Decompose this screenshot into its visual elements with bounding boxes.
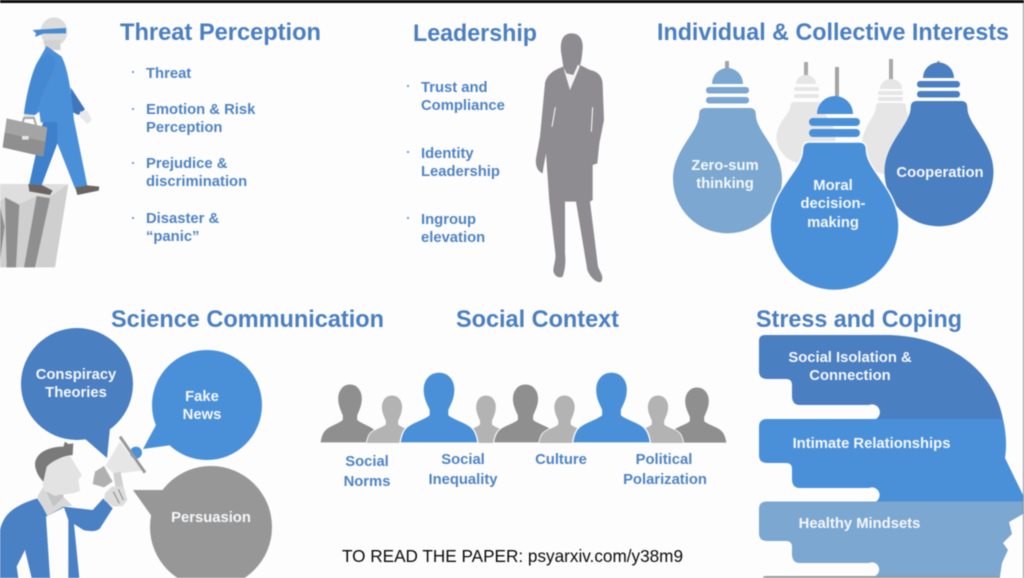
heading: leadership: Leadership bbox=[413, 20, 537, 47]
icon: faded light bulb left bbox=[776, 62, 836, 164]
list: threat topics bbox=[132, 66, 256, 245]
speech bubble: fake news bbox=[143, 350, 262, 460]
panel: threat perception bbox=[0, 17, 321, 267]
list: threat topics: discrimination bbox=[146, 174, 247, 190]
list: leadership topics: Compliance bbox=[421, 98, 505, 114]
panel: leadership bbox=[407, 20, 604, 282]
list: leadership topics: elevation bbox=[421, 230, 485, 246]
label: culture: Culture bbox=[535, 452, 587, 468]
list: threat topics: Prejudice & bbox=[146, 156, 228, 172]
speech bubble: persuasion: Persuasion bbox=[171, 510, 251, 526]
head band: cut-off grey band bbox=[763, 576, 1000, 578]
list: leadership topics bbox=[407, 80, 505, 246]
speech bubble: conspiracy theories: Theories bbox=[45, 385, 107, 401]
head band: social isolation and connection: Social Isolation & bbox=[788, 350, 912, 366]
heading: individual and collective interests: Individual & Collective Interests bbox=[657, 19, 1009, 46]
footer: paper link: TO READ THE PAPER: psyarxiv.com/y38m9 bbox=[342, 546, 683, 566]
icon: light bulb moral decision-making bbox=[770, 67, 899, 290]
head band: intimate relationships: Intimate Relationships bbox=[793, 436, 950, 452]
list: threat topics: Disaster & bbox=[146, 211, 220, 227]
list: leadership topics: Identity bbox=[421, 146, 474, 162]
label: political polarization: Political bbox=[636, 452, 692, 468]
panel: science communication bbox=[0, 306, 384, 578]
list: threat topics: Emotion & Risk bbox=[146, 102, 256, 118]
icon: light bulb zero-sum thinking: Zero-sum bbox=[691, 158, 759, 174]
list: leadership topics: Ingroup bbox=[421, 212, 476, 228]
heading: science communication: Science Communication bbox=[111, 306, 384, 333]
speech bubble: fake news: News bbox=[183, 407, 221, 423]
icon: light bulb moral decision-making: decision- bbox=[801, 196, 866, 212]
panel: social context bbox=[320, 306, 727, 490]
illustration: man with megaphone bbox=[0, 437, 145, 578]
head band: intimate relationships bbox=[759, 419, 1023, 502]
label: social inequality bbox=[428, 452, 498, 488]
illustration: blindfolded man walking off a cliff bbox=[0, 17, 99, 267]
speech bubble: fake news: Fake bbox=[185, 389, 219, 405]
label: political polarization bbox=[623, 452, 707, 488]
head band: social isolation and connection: Connection bbox=[809, 368, 891, 384]
speech bubble: conspiracy theories: Conspiracy bbox=[36, 367, 117, 383]
list: threat topics: Perception bbox=[146, 120, 222, 136]
label: social norms bbox=[344, 454, 390, 490]
heading: social context: Social Context bbox=[456, 306, 619, 333]
panel: individual and collective interests bbox=[657, 19, 1009, 290]
head band: healthy mindsets: Healthy Mindsets bbox=[799, 516, 920, 532]
icon: light bulb moral decision-making: Moral bbox=[813, 178, 853, 194]
icon: light bulb moral decision-making: making bbox=[807, 215, 859, 231]
list: threat topics: Threat bbox=[146, 66, 191, 82]
list: leadership topics: Leadership bbox=[421, 164, 500, 180]
label: political polarization: Polarization bbox=[623, 472, 707, 488]
heading: stress and coping: Stress and Coping bbox=[756, 306, 962, 333]
icon: faded light bulb right bbox=[862, 59, 920, 175]
label: social inequality: Social bbox=[441, 452, 485, 468]
icon: light bulb cooperation bbox=[884, 61, 994, 226]
icon: light bulb zero-sum thinking: thinking bbox=[696, 176, 754, 192]
list: threat topics: “panic” bbox=[146, 229, 199, 245]
list: leadership topics: Trust and bbox=[421, 80, 488, 96]
head band: social isolation and connection bbox=[759, 335, 1003, 420]
icon: light bulb zero-sum thinking bbox=[673, 61, 782, 233]
speech bubble: conspiracy theories bbox=[21, 328, 133, 458]
speech bubble: persuasion bbox=[133, 466, 272, 578]
illustration: woman silhouette bbox=[536, 33, 604, 282]
label: social norms: Social bbox=[345, 454, 389, 470]
heading: threat perception: Threat Perception bbox=[120, 19, 321, 46]
label: social norms: Norms bbox=[344, 474, 390, 490]
head band: healthy mindsets bbox=[759, 502, 1023, 576]
icon: light bulb cooperation: Cooperation bbox=[896, 165, 984, 181]
panel: stress and coping bbox=[756, 306, 1023, 578]
illustration: row of people silhouettes bbox=[320, 372, 727, 443]
label: social inequality: Inequality bbox=[428, 472, 498, 488]
